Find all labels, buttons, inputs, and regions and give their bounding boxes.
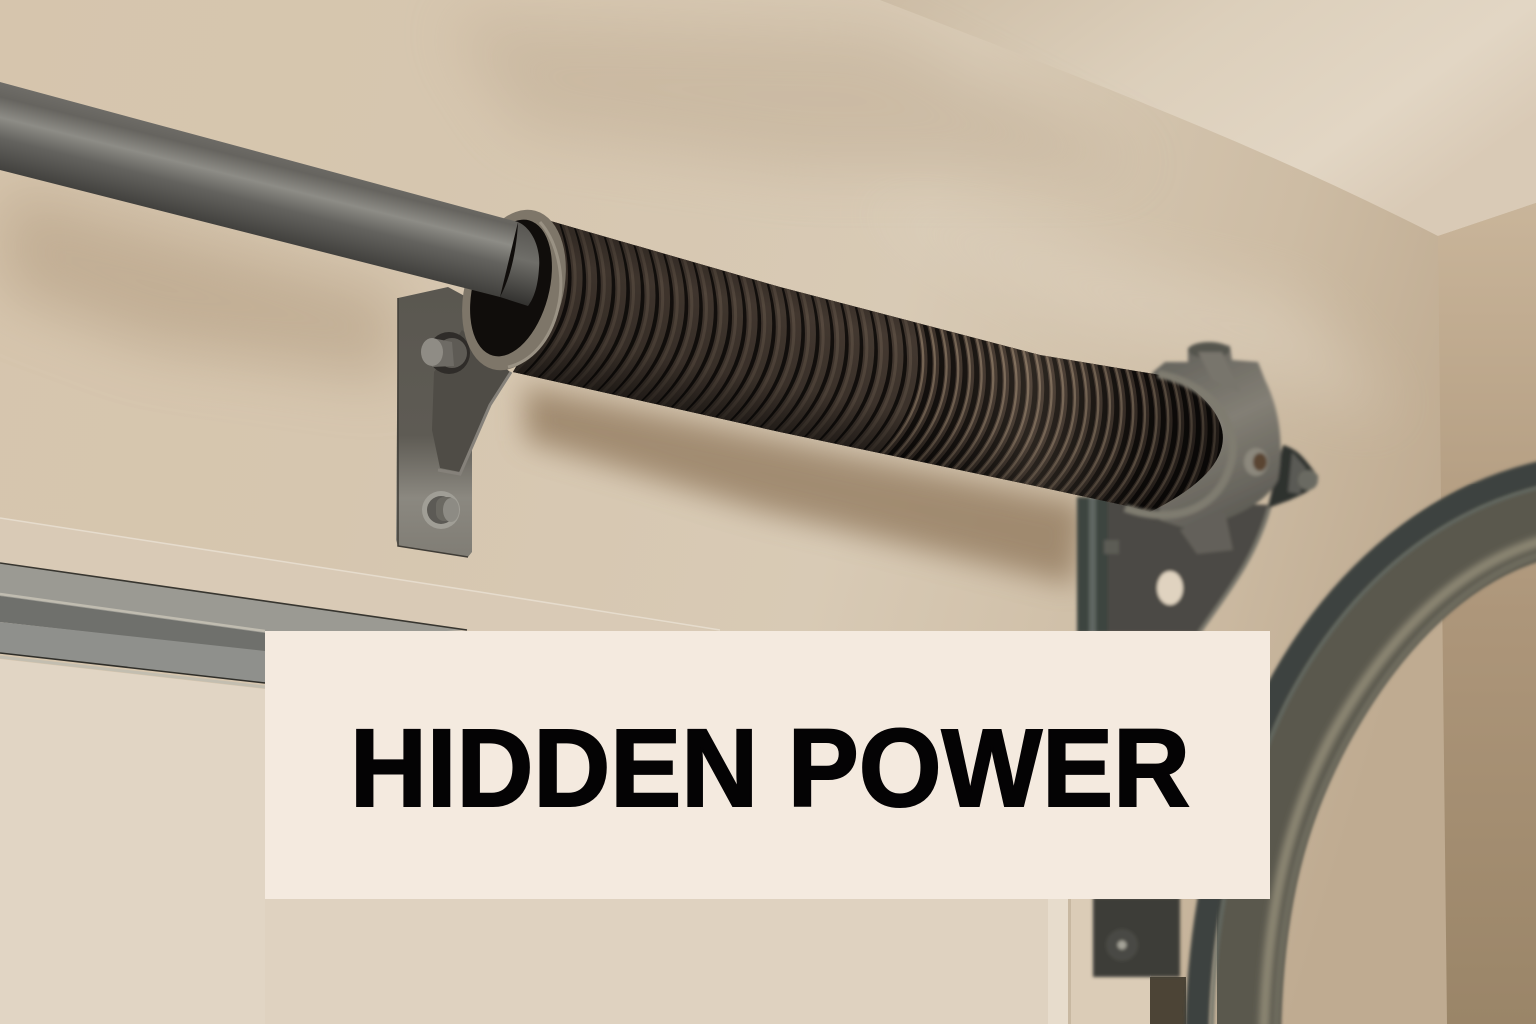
- right side wall: [1438, 203, 1536, 1024]
- door frame right of panel: [1048, 895, 1186, 1024]
- horizontal rail: [0, 563, 467, 687]
- torsion spring: [513, 221, 1223, 512]
- spring left collar ring: [445, 198, 583, 382]
- left wall bracket: [396, 287, 511, 557]
- right end bracket behind spring: [1077, 342, 1318, 633]
- header trim board: [0, 518, 1075, 640]
- title text: HIDDEN POWER: [350, 707, 1190, 830]
- lower bracket: [1093, 897, 1180, 977]
- title banner: [265, 631, 1270, 899]
- spring end collar: [1125, 374, 1233, 515]
- soft wall shadow bands: [0, 20, 1400, 585]
- curved track: [1197, 472, 1536, 1024]
- ceiling: [880, 0, 1536, 236]
- lower door panel: [0, 659, 265, 1024]
- steel rod: [0, 82, 539, 306]
